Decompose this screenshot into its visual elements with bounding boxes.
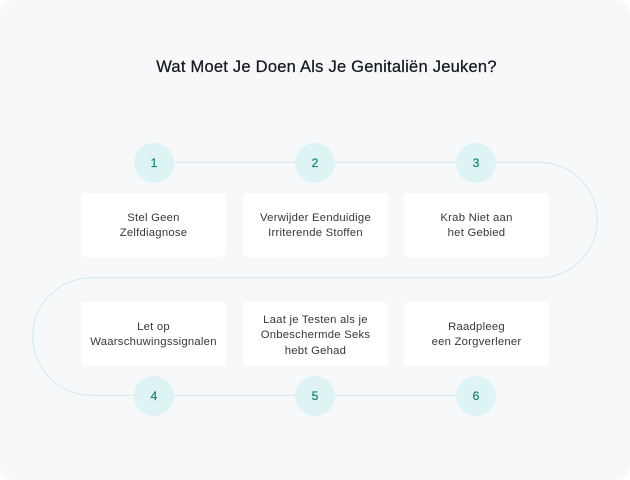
step 3 number bbox=[456, 143, 496, 183]
step 2 card: Verwijder Eenduidige bbox=[260, 212, 371, 224]
step 2 number: 2 bbox=[312, 156, 318, 170]
step 3 number: 3 bbox=[473, 156, 479, 170]
step 5 card: Onbeschermde Seks bbox=[261, 329, 370, 341]
step 1 card: Zelfdiagnose bbox=[120, 227, 187, 239]
step 6 card: Raadpleeg bbox=[448, 320, 505, 332]
step 6 card: een Zorgverlener bbox=[432, 336, 521, 348]
step 5 number bbox=[295, 376, 335, 416]
step 6 number bbox=[456, 376, 496, 416]
step 5 card: hebt Gehad bbox=[285, 345, 346, 357]
step 2 number bbox=[295, 143, 335, 183]
step 5 card bbox=[243, 302, 388, 366]
step 6 card bbox=[404, 302, 549, 366]
step 3 card bbox=[404, 193, 549, 257]
step 5 card: Laat je Testen als je bbox=[263, 314, 368, 326]
step 4 card: Waarschuwingssignalen bbox=[90, 336, 217, 348]
step 2 card: Irriterende Stoffen bbox=[268, 227, 363, 239]
step 4 card: Let op bbox=[137, 320, 170, 332]
step 2 card bbox=[243, 193, 388, 257]
step 1 card: Stel Geen bbox=[127, 212, 180, 224]
step 1 card bbox=[81, 193, 226, 257]
step 4 number: 4 bbox=[151, 389, 157, 403]
step 3 card: het Gebied bbox=[448, 227, 505, 239]
step 4 card bbox=[81, 302, 226, 366]
step 1 number: 1 bbox=[151, 156, 157, 170]
step 6 number: 6 bbox=[473, 389, 479, 403]
step 3 card: Krab Niet aan bbox=[440, 212, 513, 224]
step 1 number bbox=[134, 143, 174, 183]
title: Wat Moet Je Doen Als Je Genitaliën Jeuken? bbox=[156, 58, 497, 76]
step 5 number: 5 bbox=[312, 389, 318, 403]
step 4 number bbox=[134, 376, 174, 416]
